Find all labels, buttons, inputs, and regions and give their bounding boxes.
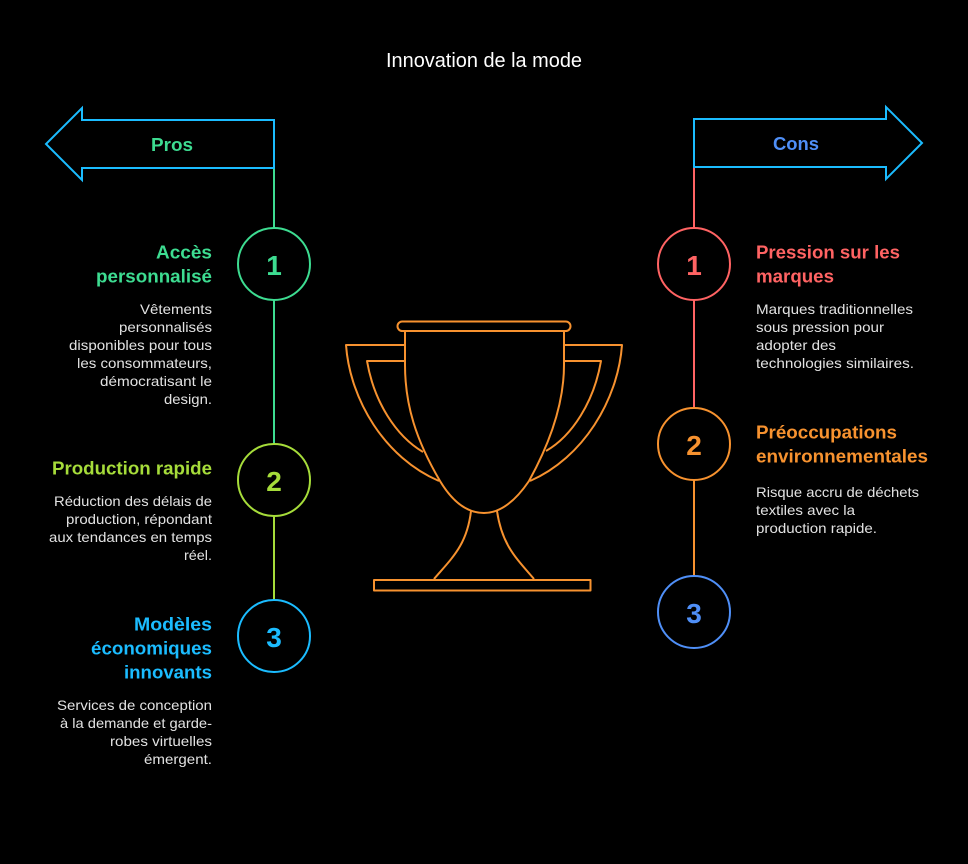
item 1 badge — [658, 228, 730, 300]
arrow: cons — [694, 107, 922, 179]
item 1 text: sous pression pour — [756, 319, 884, 335]
item 1 heading: Pression sur les — [756, 242, 900, 262]
item 2 badge — [238, 444, 310, 516]
arrow: pros — [46, 108, 274, 180]
trophy right handle — [530, 345, 622, 481]
item 2 text: production rapide. — [756, 520, 877, 536]
item 1 text — [756, 301, 914, 371]
connector line: pros green — [273, 168, 275, 444]
item 1 text: Marques traditionnelles — [756, 301, 913, 317]
item 3 text: Services de conception — [57, 697, 212, 713]
item 3 text — [57, 697, 212, 767]
connector line: cons red — [693, 167, 695, 408]
item 2 text: Réduction des délais de — [54, 493, 212, 509]
item 3 text: émergent. — [144, 751, 212, 767]
item 1 badge — [238, 228, 310, 300]
item 3 badge: 3 — [686, 598, 702, 629]
item 1 heading: marques — [756, 266, 834, 286]
item 2 text — [49, 493, 212, 563]
item 1 badge: 1 — [686, 250, 702, 281]
icon: trophy — [346, 322, 622, 590]
item 2 text: réel. — [184, 547, 212, 563]
item 3 heading: innovants — [124, 662, 212, 682]
trophy left handle — [346, 345, 439, 481]
item 1 heading — [96, 242, 212, 286]
item 1 text: les consommateurs, — [77, 355, 212, 371]
trophy cup — [405, 331, 564, 513]
trophy base — [374, 580, 590, 590]
item 1 heading: Accès — [156, 242, 212, 262]
title: Innovation de la mode — [386, 50, 582, 72]
item 1 heading — [756, 242, 900, 286]
item 1 text: démocratisant le — [100, 373, 212, 389]
item 3 badge — [238, 600, 310, 672]
item 1 text: personnalisés — [119, 319, 212, 335]
item 1 heading: personnalisé — [96, 266, 212, 286]
connector line: cons orange — [693, 480, 695, 576]
item 2 text: Risque accru de déchets — [756, 484, 919, 500]
item 1 text: Vêtements — [140, 301, 212, 317]
item 1 text — [69, 301, 212, 407]
item 3 text: à la demande et garde- — [60, 715, 212, 731]
item 1 text: adopter des — [756, 337, 836, 353]
item 2 text: textiles avec la — [756, 502, 855, 518]
item 1 text: design. — [164, 391, 212, 407]
item 2 text: aux tendances en temps — [49, 529, 212, 545]
item 3 heading — [91, 614, 212, 682]
item 1 text: technologies similaires. — [756, 355, 914, 371]
item 1 badge: 1 — [266, 250, 282, 281]
item 2 heading — [756, 422, 928, 466]
item 3 heading: Modèles — [134, 614, 212, 634]
trophy lid — [398, 322, 570, 331]
connector line: pros lime — [273, 516, 275, 600]
item 2 badge — [658, 408, 730, 480]
item 3 text: robes virtuelles — [110, 733, 212, 749]
item 2 heading: Production rapide — [52, 458, 212, 478]
item 2 badge: 2 — [266, 466, 282, 497]
item 3 heading: économiques — [91, 638, 212, 658]
item 3 badge: 3 — [266, 622, 282, 653]
heading: cons: Cons — [773, 134, 819, 154]
item 2 badge: 2 — [686, 430, 702, 461]
panel: pros column — [46, 108, 310, 767]
trophy stem — [434, 511, 534, 579]
item 2 heading: environnementales — [756, 446, 928, 466]
item 1 text: disponibles pour tous — [69, 337, 212, 353]
item 3 badge — [658, 576, 730, 648]
item 2 text: production, répondant — [66, 511, 212, 527]
item 2 text — [756, 484, 919, 536]
heading: pros: Pros — [151, 135, 193, 155]
panel: cons column — [658, 107, 928, 648]
item 2 heading: Préoccupations — [756, 422, 897, 442]
